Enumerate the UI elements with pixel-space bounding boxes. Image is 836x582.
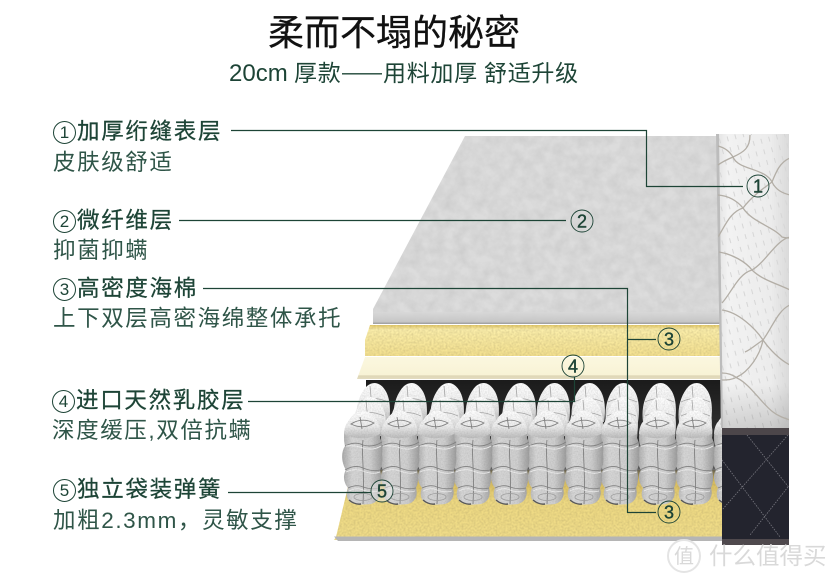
subtitle: 厚款 (294, 60, 341, 86)
panel: latex layer (357, 357, 722, 379)
text block: layer 2: 微纤维层 (77, 208, 174, 233)
subtitle: 舒适升级 (484, 60, 579, 86)
subtitle: —— (342, 62, 382, 84)
text block: layer 1: 皮肤级舒适 (53, 150, 174, 175)
panel: upper foam layer (365, 325, 721, 356)
callout 2 (571, 210, 593, 232)
panel: dark mattress base (722, 428, 795, 545)
panel: bottom foam layer (334, 470, 722, 541)
text block: layer 1: 1 (60, 123, 69, 142)
text block: layer 4: 4 (59, 392, 68, 411)
text block: layer 2: 2 (60, 212, 69, 231)
text block: layer 1: 加厚绗缝表层 (77, 119, 222, 144)
panel: microfiber layer (373, 136, 720, 324)
watermark (668, 540, 826, 572)
title: 柔而不塌的秘密 (268, 12, 520, 53)
callout 5: 5 (377, 482, 387, 502)
callout 4: 4 (568, 356, 578, 376)
callout 3 lower (658, 501, 680, 523)
text block: layer 5 (53, 477, 298, 533)
text block: layer 4: 深度缓压,双倍抗螨 (52, 418, 253, 443)
leader line 5 (228, 492, 371, 494)
subtitle: 20cm (229, 60, 288, 87)
text block: layer 4: 进口天然乳胶层 (76, 388, 245, 413)
callout 3 lower: 3 (664, 502, 674, 522)
text block: layer 3: 高密度海棉 (77, 276, 198, 301)
callout 1 (747, 175, 769, 197)
panel: quilted cover (716, 134, 790, 428)
callout 1: 1 (753, 176, 763, 196)
callout 4 (562, 355, 584, 377)
text block: layer 4 (52, 388, 253, 443)
text block: layer 2: 抑菌抑螨 (53, 238, 149, 263)
text block: layer 5: 独立袋装弹簧 (77, 477, 222, 502)
callout 2: 2 (577, 212, 587, 232)
text block: layer 5: 5 (60, 481, 69, 500)
text block: layer 2 (53, 208, 174, 263)
callout 3 upper: 3 (664, 330, 674, 350)
leader line 3 (203, 288, 656, 512)
panel: pocket springs (342, 380, 752, 505)
watermark: 什么值得买 (709, 543, 826, 569)
text block: layer 3 (53, 276, 342, 331)
text block: layer 5: 加粗2.3mm，灵敏支撑 (53, 508, 298, 533)
leader line 4 (248, 377, 574, 402)
leader line 2 (179, 220, 566, 222)
callout 5 (371, 480, 393, 502)
leader line 1 (231, 130, 743, 186)
subtitle: 用料加厚 (383, 60, 478, 86)
text block: layer 3: 3 (60, 280, 69, 299)
text block: layer 1 (53, 119, 222, 175)
subtitle (229, 60, 579, 87)
watermark: 值 (674, 545, 694, 568)
callout 3 upper (658, 328, 680, 350)
text block: layer 3: 上下双层高密海绵整体承托 (53, 306, 342, 331)
